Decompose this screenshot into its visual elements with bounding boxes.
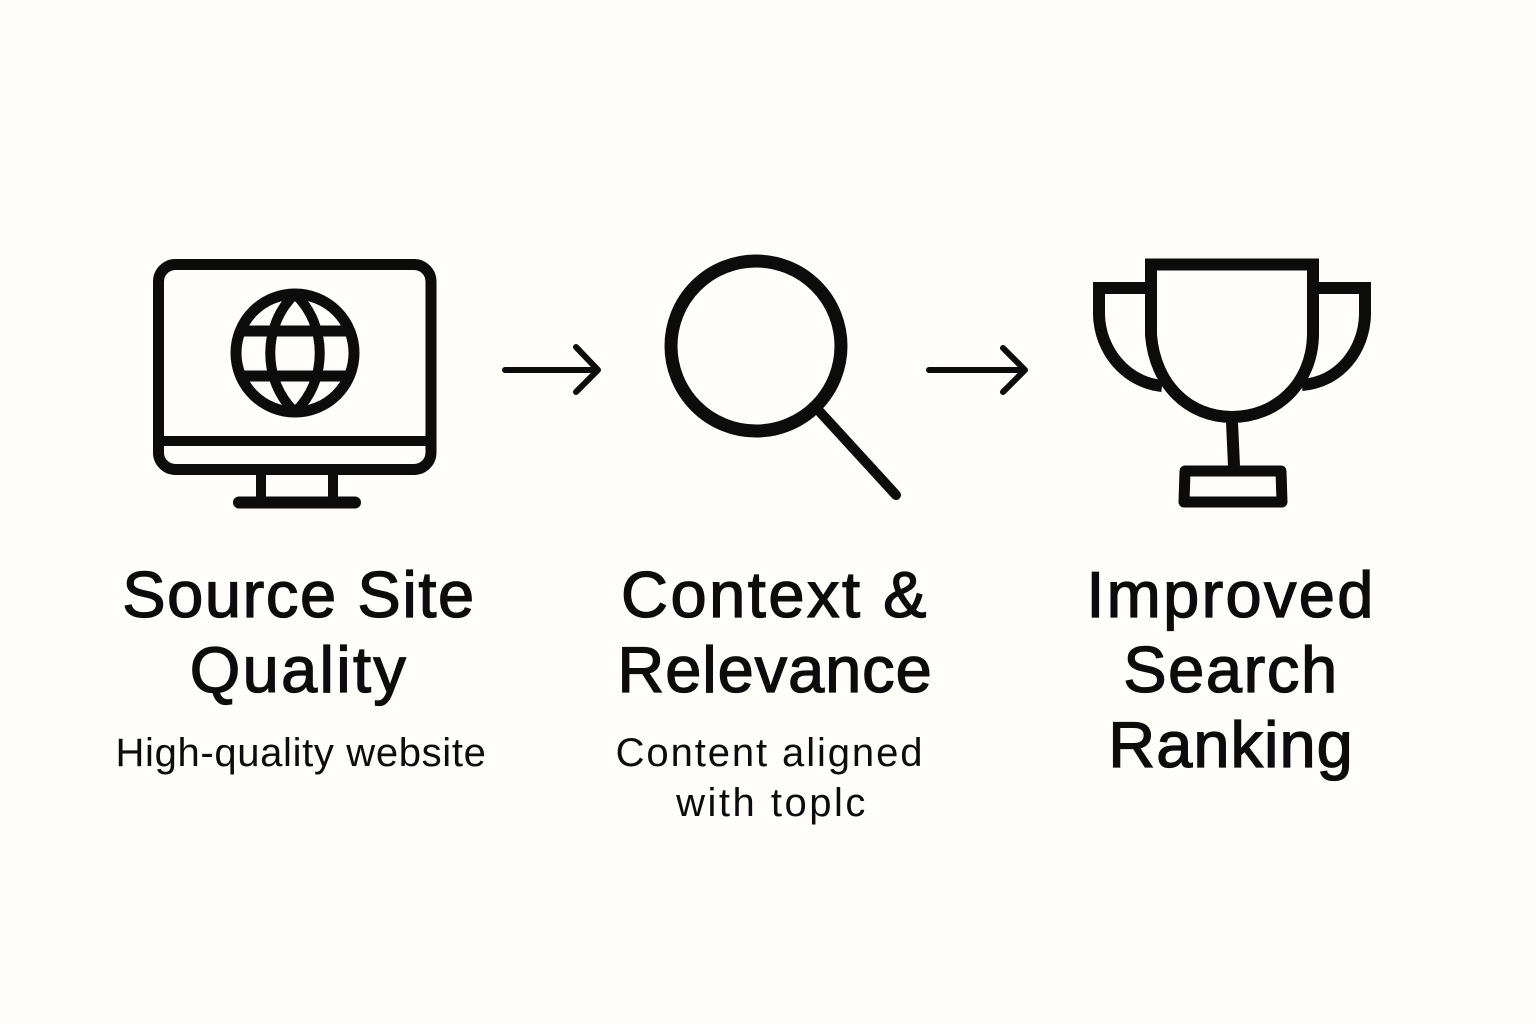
text: Content aligned with toplc xyxy=(616,731,924,825)
text: High-quality website: High-quality website xyxy=(116,731,486,775)
arrow: magnifier to trophy xyxy=(929,348,1025,392)
heading: Context & Relevance xyxy=(617,558,933,706)
text: Content aligned with toplc: with toplc xyxy=(676,781,868,825)
icon: trophy xyxy=(1099,264,1365,502)
heading: Source Site Quality xyxy=(122,558,476,706)
icon: monitor with globe xyxy=(158,264,431,502)
heading: Improved Search Ranking: Search xyxy=(1123,633,1339,706)
heading: Source Site Quality: Quality xyxy=(190,633,408,706)
heading: Improved Search Ranking: Ranking xyxy=(1108,708,1354,781)
heading: Improved Search Ranking: Improved xyxy=(1086,558,1376,631)
icon: magnifying glass xyxy=(671,261,896,495)
heading: Context & Relevance: Relevance xyxy=(617,633,933,706)
heading: Context & Relevance: Context & xyxy=(621,558,929,631)
arrow: monitor to magnifier xyxy=(505,347,598,392)
text: Content aligned with toplc: Content aligned xyxy=(616,731,924,775)
heading: Source Site Quality: Source Site xyxy=(122,558,476,631)
heading: Improved Search Ranking xyxy=(1086,558,1376,782)
